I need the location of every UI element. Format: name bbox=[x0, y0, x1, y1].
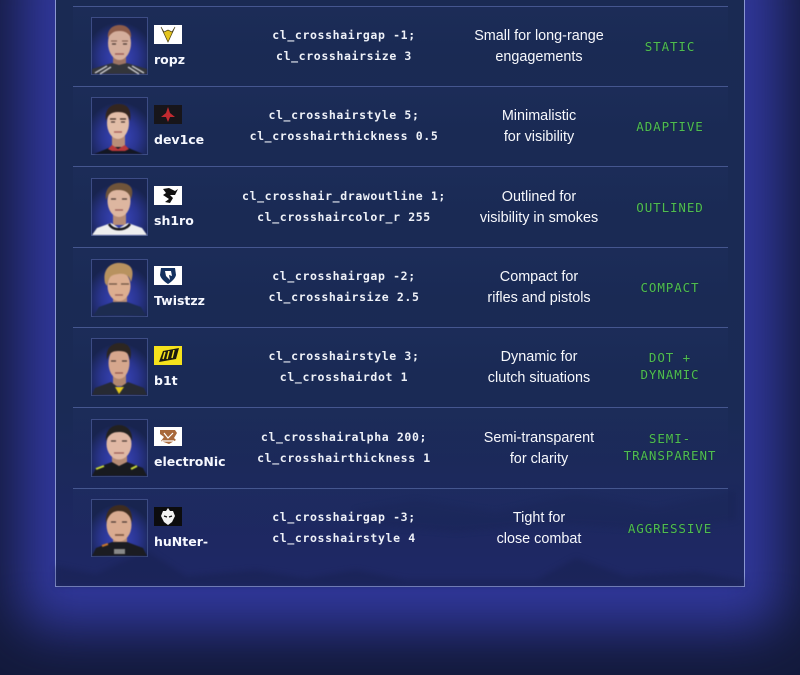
description bbox=[497, 510, 582, 547]
console commands: cl_crosshairsize 2.5 bbox=[268, 290, 420, 304]
description: visibility in smokes bbox=[480, 210, 598, 226]
logo: Team Liquid bbox=[154, 266, 182, 285]
logo: Astralis bbox=[154, 105, 182, 124]
description bbox=[480, 189, 598, 226]
console commands bbox=[250, 108, 438, 143]
description: engagements bbox=[495, 49, 583, 65]
style tag: AGGRESSIVE bbox=[628, 521, 712, 536]
row: ropz bbox=[73, 6, 728, 87]
description bbox=[474, 28, 604, 65]
portrait: huNter- bbox=[91, 499, 148, 557]
description: Outlined for bbox=[502, 189, 576, 205]
style tag bbox=[624, 431, 716, 463]
console commands bbox=[242, 189, 446, 224]
row: b1t bbox=[73, 327, 728, 408]
portrait: electroNic bbox=[91, 419, 148, 477]
console commands: cl_crosshair_drawoutline 1; bbox=[242, 189, 446, 203]
console commands: cl_crosshairdot 1 bbox=[280, 370, 408, 384]
row: huNter- bbox=[73, 488, 728, 569]
description: Small for long-range bbox=[474, 28, 604, 44]
console commands bbox=[272, 28, 416, 63]
portrait: ropz bbox=[91, 17, 148, 75]
description bbox=[487, 269, 591, 306]
style tag: SEMI- bbox=[649, 431, 691, 446]
console commands bbox=[268, 269, 420, 304]
logo: Team Spirit bbox=[154, 186, 182, 205]
description: Compact for bbox=[500, 269, 578, 285]
description: Semi-transparent bbox=[484, 430, 594, 446]
description bbox=[488, 349, 590, 386]
style tag: DYNAMIC bbox=[640, 367, 699, 382]
description bbox=[484, 430, 594, 467]
console commands: cl_crosshaircolor_r 255 bbox=[257, 210, 431, 224]
style tag: ADAPTIVE bbox=[636, 119, 704, 134]
console commands: cl_crosshairstyle 4 bbox=[272, 531, 416, 545]
logo: G2 bbox=[154, 507, 182, 526]
console commands: cl_crosshairstyle 3; bbox=[268, 349, 420, 363]
style tag: TRANSPARENT bbox=[624, 448, 716, 463]
description: close combat bbox=[497, 531, 581, 547]
console commands: cl_crosshairthickness 0.5 bbox=[250, 129, 438, 143]
player name: electroNic bbox=[154, 454, 226, 469]
console commands: cl_crosshairstyle 5; bbox=[268, 108, 420, 122]
console commands: cl_crosshairthickness 1 bbox=[257, 451, 431, 465]
logo: Natus Vincere bbox=[154, 346, 182, 365]
description: Dynamic for bbox=[501, 349, 577, 365]
logo: Vitality bbox=[154, 25, 182, 44]
player name: ropz bbox=[154, 52, 185, 67]
description: Tight for bbox=[513, 510, 565, 526]
style tag: COMPACT bbox=[640, 280, 699, 295]
portrait: Twistzz bbox=[91, 259, 148, 317]
description: for clarity bbox=[510, 451, 568, 467]
console commands: cl_crosshairsize 3 bbox=[276, 49, 412, 63]
row: sh1ro bbox=[73, 166, 728, 248]
row: electroNic bbox=[73, 407, 728, 489]
console commands: cl_crosshairgap -2; bbox=[272, 269, 416, 283]
player name: dev1ce bbox=[154, 132, 204, 147]
description: rifles and pistols bbox=[487, 290, 591, 306]
style tag: DOT + bbox=[649, 350, 691, 365]
console commands bbox=[268, 349, 420, 384]
console commands: cl_crosshairgap -3; bbox=[272, 510, 416, 524]
style tag: OUTLINED bbox=[636, 200, 704, 215]
player name: Twistzz bbox=[154, 293, 205, 308]
description: Minimalistic bbox=[502, 108, 576, 124]
console commands: cl_crosshairalpha 200; bbox=[261, 430, 427, 444]
row: dev1ce bbox=[73, 86, 728, 167]
portrait: sh1ro bbox=[91, 178, 148, 236]
portrait: dev1ce bbox=[91, 97, 148, 155]
description: for visibility bbox=[504, 129, 574, 145]
description: clutch situations bbox=[488, 370, 590, 386]
player name: huNter- bbox=[154, 534, 208, 549]
portrait: b1t bbox=[91, 338, 148, 396]
style tag: STATIC bbox=[645, 39, 695, 54]
player name: sh1ro bbox=[154, 213, 194, 228]
panel: crosshair table bbox=[55, 0, 745, 587]
player name: b1t bbox=[154, 373, 178, 388]
console commands: cl_crosshairgap -1; bbox=[272, 28, 416, 42]
console commands bbox=[257, 430, 431, 465]
logo: Virtus.pro bbox=[154, 427, 182, 446]
style tag bbox=[640, 350, 699, 382]
description bbox=[502, 108, 576, 145]
row: Twistzz bbox=[73, 247, 728, 328]
console commands bbox=[272, 510, 416, 545]
